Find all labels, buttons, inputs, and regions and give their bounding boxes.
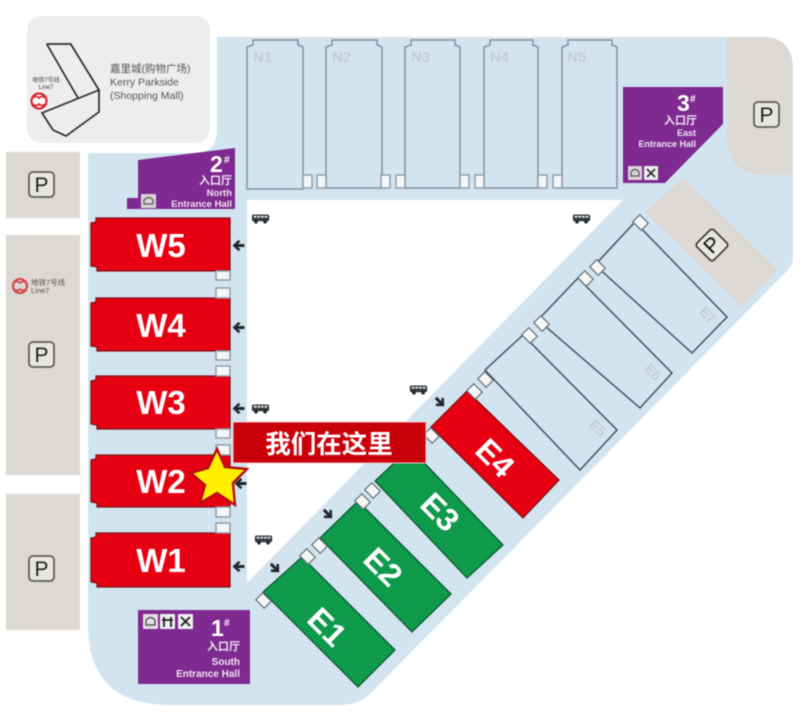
callout: we are here: 我们在这里 xyxy=(265,431,393,459)
hall N1: N1 xyxy=(253,49,272,66)
icon: information xyxy=(160,614,175,629)
hall E3: E3 xyxy=(413,485,467,539)
icon: bus xyxy=(252,404,269,414)
entrance label: 入口厅 xyxy=(664,115,697,127)
arrow xyxy=(233,322,244,333)
panel: east entrance hall 3 xyxy=(623,87,723,183)
icon: parking sign rotated: P xyxy=(699,232,725,258)
icon: parking sign: P xyxy=(34,344,49,367)
icon: mall outline xyxy=(42,44,99,136)
hall W2: W2 xyxy=(136,463,186,500)
icon: restaurant xyxy=(178,614,193,629)
metro sign: left parking: 地铁7号线 xyxy=(31,278,65,287)
hall W2 xyxy=(91,445,230,517)
entrance label: Entrance Hall xyxy=(176,669,240,680)
hall N3: N3 xyxy=(411,49,430,66)
hall W1 xyxy=(91,523,230,587)
hall N5 xyxy=(553,40,617,188)
panel: south entrance hall 1 xyxy=(138,610,250,684)
number mark: # xyxy=(690,94,696,105)
entrance label: Entrance Hall xyxy=(171,199,232,210)
arrow xyxy=(233,403,244,414)
icon: parking sign xyxy=(29,342,54,367)
hall N2: N2 xyxy=(332,49,351,66)
arrow xyxy=(233,561,244,572)
hall W5 xyxy=(91,218,230,280)
mall text: (Shopping Mall) xyxy=(110,90,184,102)
parking: bottom left xyxy=(6,494,80,630)
icon: metro logo xyxy=(32,94,46,108)
icon: parking sign xyxy=(29,556,54,581)
icon: parking sign xyxy=(754,102,779,127)
arrow xyxy=(235,478,246,489)
icon: parking sign xyxy=(29,172,54,197)
mall text: Kerry Parkside xyxy=(110,76,179,88)
metro sign: left parking xyxy=(13,277,66,295)
hall E6 xyxy=(534,271,672,408)
entrance label: 入口厅 xyxy=(199,175,232,187)
icon: restaurant xyxy=(644,166,658,180)
metro line label: Line7 xyxy=(39,85,54,91)
entrance label: East xyxy=(677,128,696,138)
metro sign: left parking: Line7 xyxy=(31,286,49,295)
arrow diagonal xyxy=(432,394,448,410)
hall E4 xyxy=(424,384,559,518)
entrance label: Entrance Hall xyxy=(638,139,696,149)
panel: Kerry Parkside shopping mall xyxy=(27,16,210,143)
hall E4: E4 xyxy=(468,431,522,485)
icon: ticket xyxy=(628,166,642,180)
hall E6: E6 xyxy=(641,360,665,384)
mall text: 嘉里城(购物广场) xyxy=(110,63,190,75)
parking: middle left xyxy=(6,235,80,475)
hall N2 xyxy=(317,40,390,188)
hall N1 xyxy=(247,40,312,189)
callout: we are here xyxy=(233,422,426,463)
arrow xyxy=(233,240,244,251)
hall number: 2 xyxy=(210,151,223,177)
hall E5 xyxy=(478,328,617,470)
icon: bus xyxy=(255,535,272,545)
icon: parking sign: P xyxy=(34,558,49,581)
hall number: 1 xyxy=(211,615,224,641)
hall E3 xyxy=(365,448,503,578)
hall N5: N5 xyxy=(567,49,586,66)
icon: bus xyxy=(410,385,427,395)
number mark: # xyxy=(224,618,230,629)
metro line label: 地铁7号线 xyxy=(32,78,60,84)
hall W1: W1 xyxy=(136,542,186,579)
hall W4 xyxy=(91,288,230,360)
icon: location star xyxy=(191,449,247,505)
hall E2 xyxy=(312,494,451,632)
arrow diagonal xyxy=(320,506,336,522)
hall E7 xyxy=(590,215,727,353)
hall E7: E7 xyxy=(696,303,720,327)
hall N4 xyxy=(475,40,547,188)
central white plaza xyxy=(247,200,623,583)
hall W3 xyxy=(91,366,230,438)
hall E1: E1 xyxy=(300,600,354,654)
parking: top left xyxy=(6,152,80,218)
hall W5: W5 xyxy=(136,227,186,264)
arrow diagonal xyxy=(267,560,283,576)
hall E5: E5 xyxy=(586,416,610,440)
hall E1 xyxy=(256,549,395,687)
hall E2: E2 xyxy=(356,540,410,594)
parking: top right xyxy=(727,37,792,175)
icon: ticket xyxy=(143,614,158,629)
hall W3: W3 xyxy=(136,384,186,421)
panel: north entrance hall 2 xyxy=(127,148,235,210)
icon: ticket xyxy=(141,194,156,208)
icon: parking sign rotated xyxy=(695,228,729,262)
icon: parking sign: P xyxy=(34,174,49,197)
parking: diagonal xyxy=(645,178,778,307)
hall N3 xyxy=(396,40,469,188)
icon: parking sign: P xyxy=(759,104,774,127)
icon: bus xyxy=(252,214,269,224)
hall number: 3 xyxy=(677,90,690,116)
icon: bus xyxy=(573,214,590,224)
entrance label: South xyxy=(212,657,240,668)
number mark: # xyxy=(224,155,230,166)
hall W4: W4 xyxy=(136,307,186,344)
entrance label: 入口厅 xyxy=(207,641,240,653)
hall N4: N4 xyxy=(490,49,510,66)
entrance label: North xyxy=(207,188,232,199)
